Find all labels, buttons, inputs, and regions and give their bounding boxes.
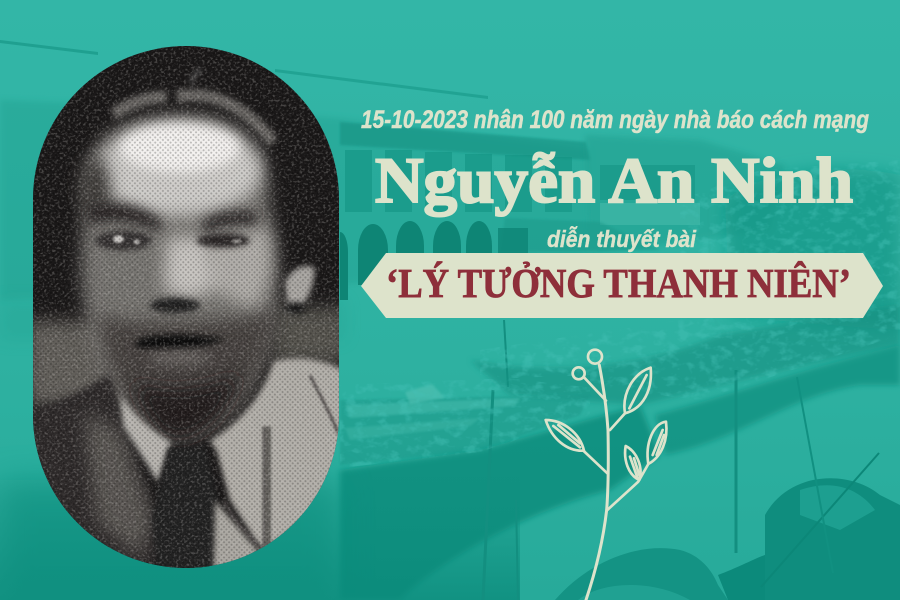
background: dark reflection on water bbox=[0, 345, 900, 600]
portrait: shirt collar left bbox=[120, 395, 172, 483]
portrait: right ear bbox=[285, 266, 315, 314]
portrait: nose bridge bbox=[163, 237, 217, 300]
portrait: eyes bbox=[95, 231, 250, 250]
background: texture mottling bbox=[340, 160, 900, 470]
portrait: mouth bbox=[137, 335, 225, 349]
portrait: tie bbox=[152, 447, 217, 581]
background: waterfront building bbox=[0, 40, 785, 340]
ribbon text: ‘LÝ TƯỞNG THANH NIÊN’ bbox=[386, 260, 851, 306]
portrait: lapel shadow lines bbox=[223, 376, 338, 549]
subtitle: diễn thuyết bài bbox=[547, 225, 697, 252]
portrait: halftone dots bbox=[33, 46, 339, 568]
background: bottom shading bbox=[0, 470, 520, 600]
background: river bank and far shore bbox=[340, 305, 900, 465]
portrait: hair sheen bbox=[113, 69, 273, 142]
portrait: shirt below tie bbox=[213, 500, 260, 577]
ribbon shape bbox=[361, 253, 883, 318]
background: bamboo poles bbox=[483, 320, 736, 600]
icon: plant sprig bbox=[546, 350, 666, 600]
portrait: lower face shadow bbox=[97, 311, 277, 439]
ribbon: speech title bbox=[361, 253, 883, 318]
portrait: nose shadow bbox=[150, 298, 200, 313]
portrait: face bbox=[82, 114, 278, 439]
background: moored boats bbox=[555, 377, 900, 600]
background: building arches bbox=[340, 221, 528, 300]
portrait: jacket left bbox=[33, 374, 155, 565]
portrait: lit cheek right bbox=[207, 227, 271, 311]
portrait: eyebrows bbox=[87, 203, 260, 234]
portrait: oval photo of Nguyễn An Ninh bbox=[27, 46, 350, 584]
portrait: speckle grain bbox=[33, 46, 339, 568]
name heading: Nguyễn An Ninh bbox=[375, 145, 853, 217]
portrait: backdrop beside neck bbox=[27, 307, 350, 405]
portrait: jacket and shirt right bbox=[210, 358, 343, 553]
portrait: forehead highlight bbox=[95, 125, 262, 216]
background: trees bbox=[725, 169, 900, 330]
portrait: shaded brow left bbox=[80, 156, 110, 219]
